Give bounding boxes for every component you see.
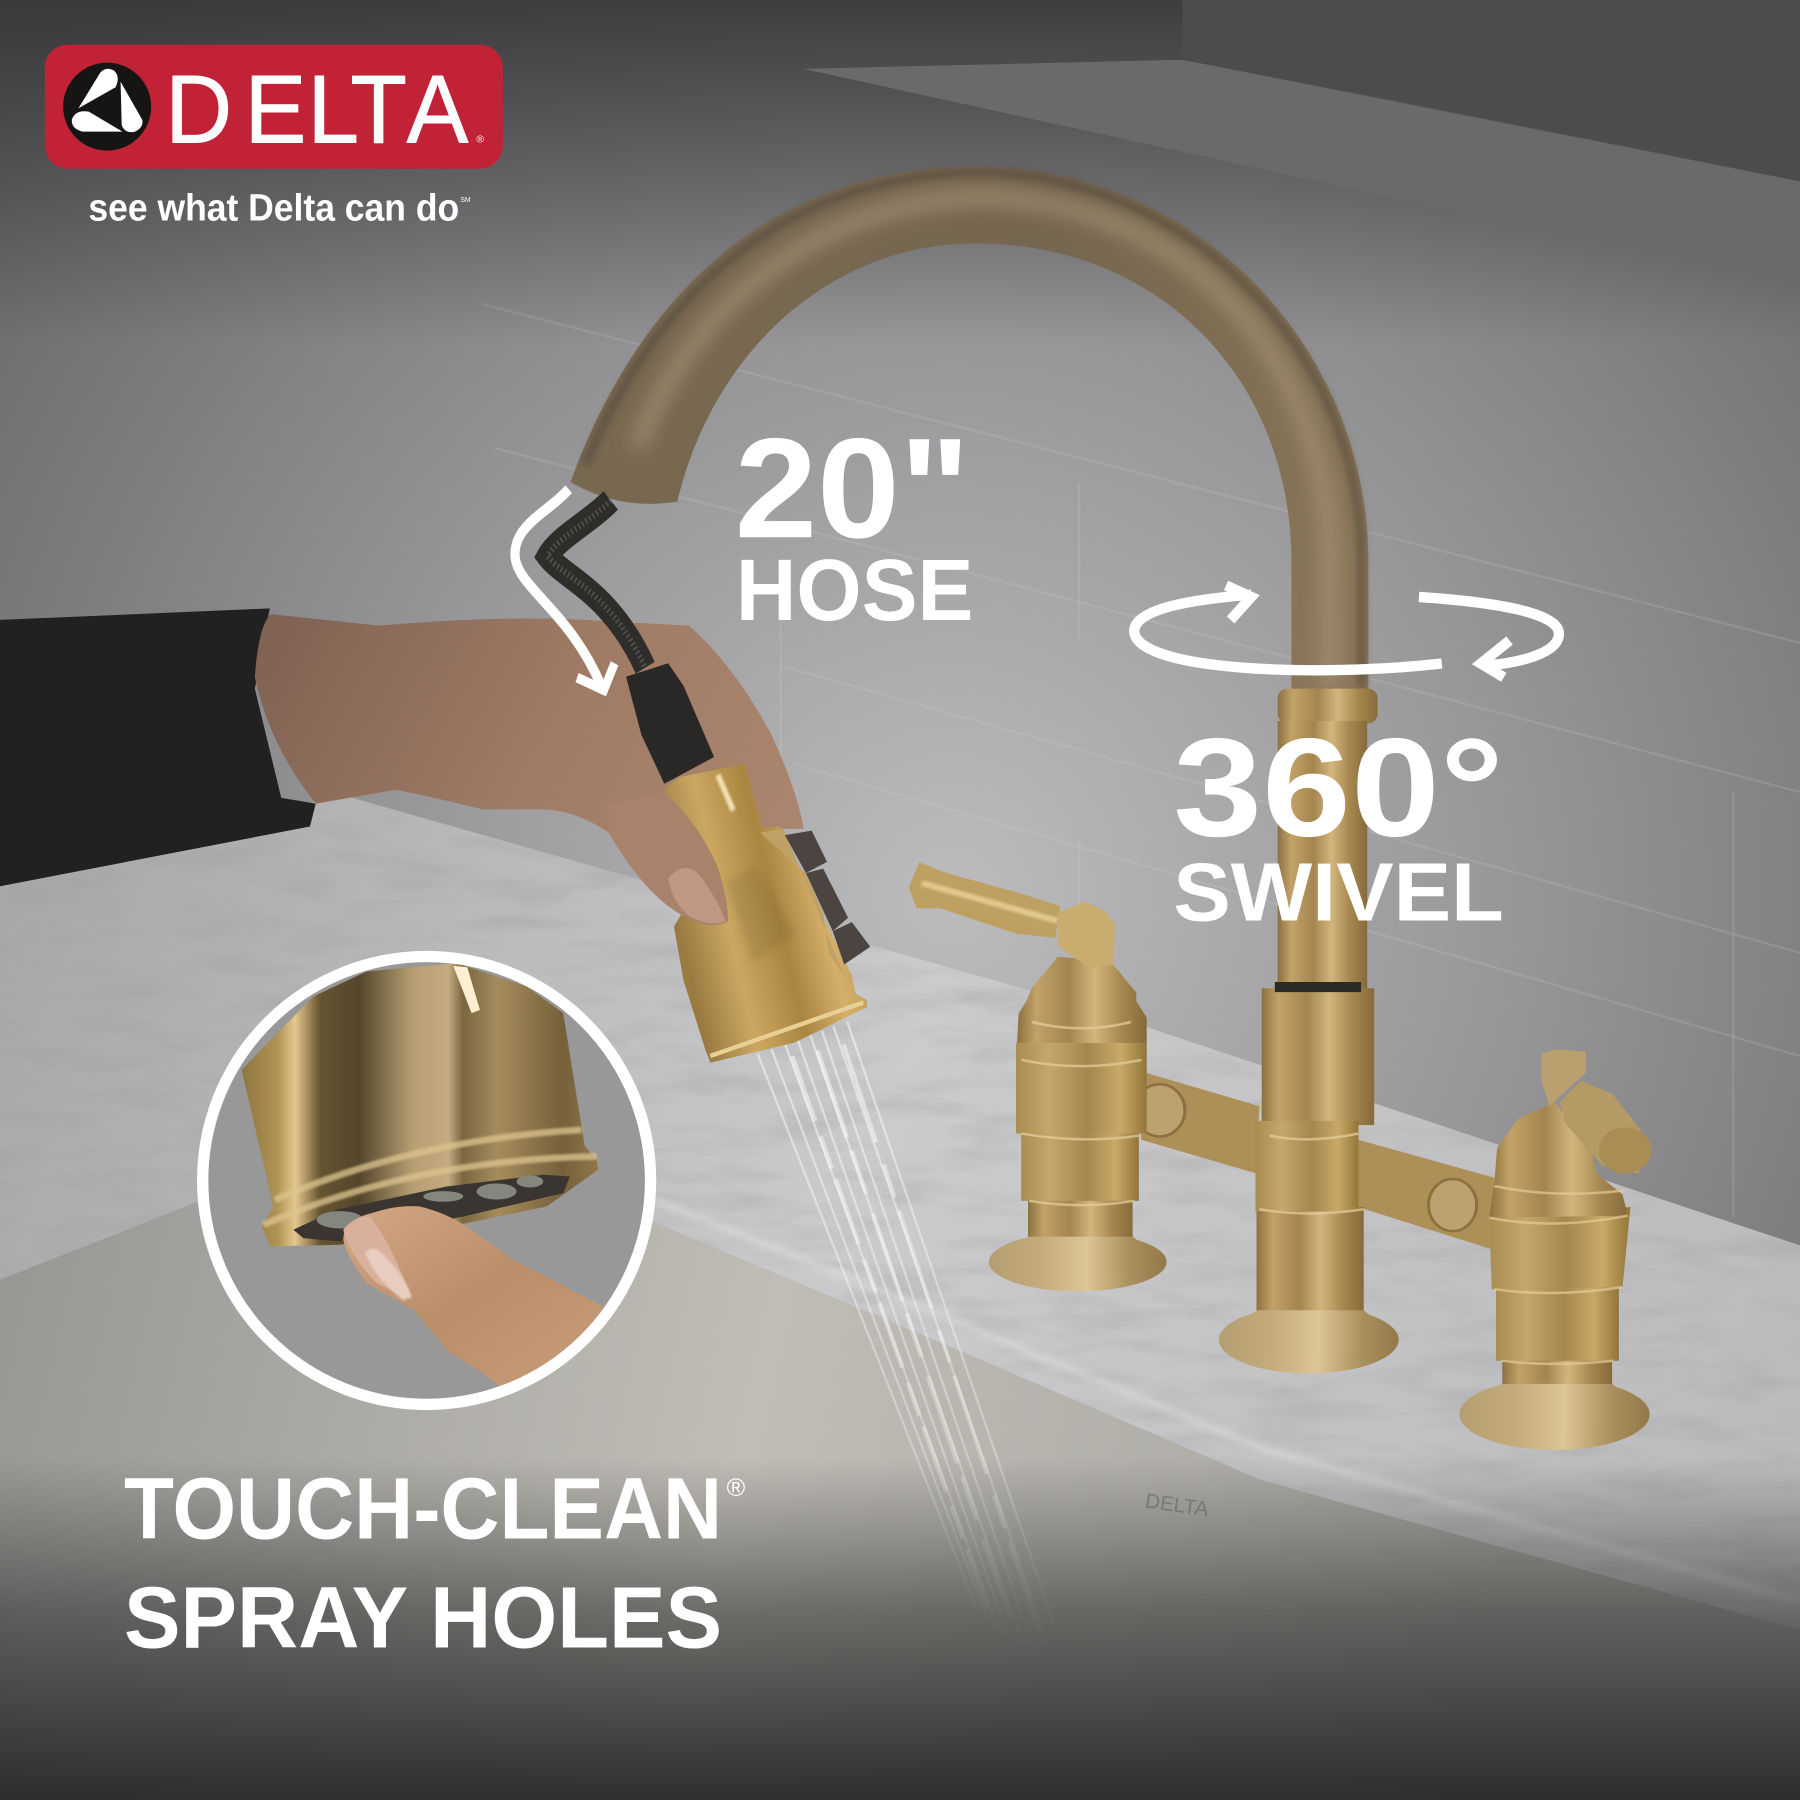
tagline: see what Delta can do <box>88 187 459 229</box>
spray holes <box>293 1175 570 1241</box>
water spray <box>758 1022 1056 1647</box>
nozzle cylinder <box>242 963 598 1246</box>
buttons <box>785 831 870 965</box>
sink basin <box>0 1194 1800 1800</box>
pull-down hose <box>548 500 645 668</box>
marble countertop <box>0 781 1800 1653</box>
label: touch-clean spray holes: ® <box>727 1474 746 1502</box>
hand and sleeve <box>0 608 804 924</box>
head body <box>664 764 867 1063</box>
logo badge <box>45 45 503 169</box>
faucet spout <box>571 166 1368 689</box>
top vignette <box>0 0 1800 344</box>
connector <box>626 663 714 784</box>
window sill at top right <box>804 0 1800 287</box>
label: 20 inch hose: 20" <box>735 409 970 568</box>
registered mark: ® <box>476 134 484 145</box>
label: 20 inch hose: HOSE <box>736 542 973 639</box>
label: 20 inch hose <box>735 409 973 639</box>
label: touch-clean spray holes: SPRAY HOLES <box>124 1569 722 1666</box>
right handle <box>1459 1049 1651 1450</box>
control panel <box>760 828 844 976</box>
bridge arms <box>1131 1068 1494 1249</box>
label: touch-clean spray holes: TOUCH-CLEAN <box>124 1460 722 1557</box>
inset: touch-clean spray closeup <box>203 957 651 1404</box>
bottom vignette <box>0 1458 1800 1800</box>
left handle <box>909 862 1167 1291</box>
faucet lower body, bridge and handles <box>909 862 1651 1450</box>
hand <box>255 614 804 924</box>
label: 360 degree swivel <box>1173 709 1504 939</box>
center column <box>1219 982 1399 1373</box>
inset ring <box>203 957 651 1404</box>
service mark: SM <box>460 197 471 204</box>
logo icon <box>63 63 151 151</box>
finger <box>343 1206 603 1386</box>
sleeve <box>0 608 316 886</box>
bolts <box>1135 1084 1477 1231</box>
highlights <box>718 775 733 811</box>
arrow: swivel rotation <box>1134 585 1559 677</box>
highlight <box>453 966 480 1013</box>
head facet shading <box>726 864 796 962</box>
spray head <box>626 663 870 1063</box>
label: touch-clean spray holes <box>124 1460 746 1666</box>
sink brand mark: DELTA <box>1144 1489 1210 1521</box>
thumbnail <box>668 868 726 924</box>
logo: Delta <box>45 45 503 229</box>
label: 360 degree swivel: SWIVEL <box>1173 846 1504 939</box>
wordmark: DELTA <box>165 56 468 164</box>
fingertip <box>343 1216 412 1300</box>
faucet stem and collar <box>1278 689 1378 996</box>
rim <box>263 1130 597 1225</box>
fingernail <box>365 1248 412 1300</box>
thumb <box>608 793 728 925</box>
label: 360 degree swivel: 360° <box>1173 709 1504 866</box>
arrow: hose path <box>515 489 615 690</box>
